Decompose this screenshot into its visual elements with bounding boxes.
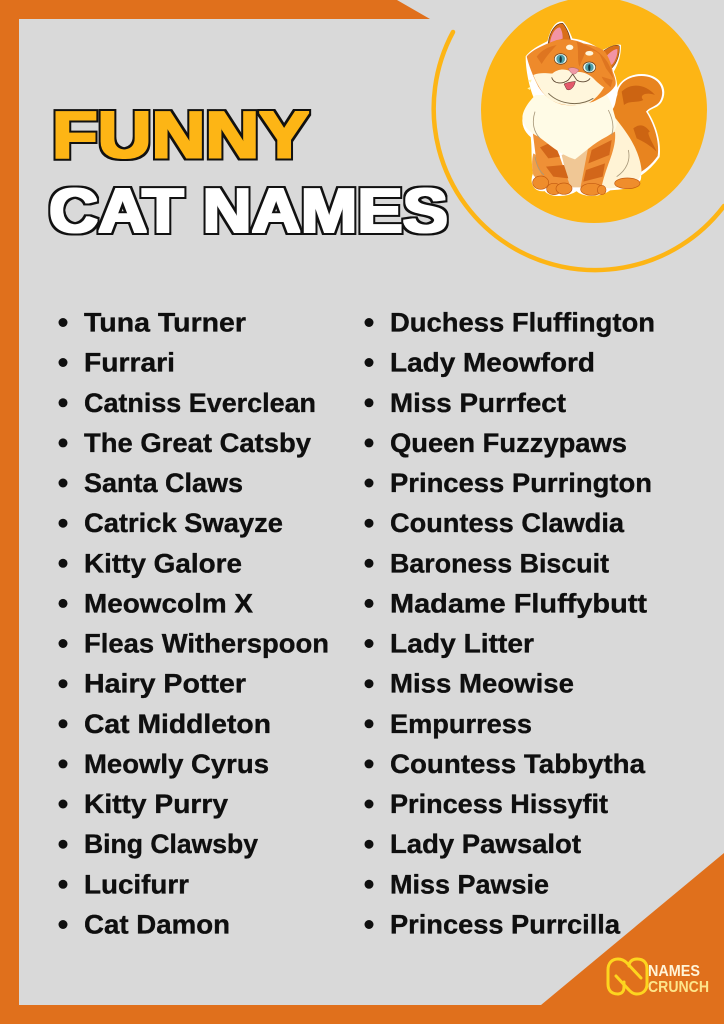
right name list xyxy=(364,308,655,940)
names: Lady Pawsalot xyxy=(390,829,581,859)
names: Queen Fuzzypaws xyxy=(390,428,627,458)
cat chin line xyxy=(548,93,593,104)
cat back haunch xyxy=(532,153,553,183)
names xyxy=(390,308,655,940)
cat left eye xyxy=(554,54,567,64)
yellow circle behind cat xyxy=(481,0,707,223)
cat silhouette sticker edge xyxy=(523,23,663,195)
names: Cat Middleton xyxy=(84,709,271,739)
names: Kitty Purry xyxy=(84,789,228,819)
names: Catrick Swayze xyxy=(84,508,283,538)
names: Meowly Cyrus xyxy=(84,749,269,779)
names: Furrari xyxy=(84,348,175,378)
cat right inner ear xyxy=(605,49,617,65)
cat right leg xyxy=(581,132,615,187)
cat head markings xyxy=(537,42,613,87)
names: Kitty Galore xyxy=(84,548,242,578)
cat left inner ear xyxy=(550,27,563,43)
title xyxy=(49,98,448,246)
cat fur lines xyxy=(533,110,629,177)
cat tail xyxy=(607,76,662,177)
logo word CRUNCH: CRUNCH xyxy=(648,979,709,996)
names: Miss Pawsie xyxy=(390,869,549,899)
names: Countess Tabbytha xyxy=(390,749,646,779)
logo mark xyxy=(608,959,647,994)
names: Catniss Everclean xyxy=(84,388,316,418)
cat belly xyxy=(562,145,590,187)
cat forehead spots xyxy=(566,45,593,56)
cat left leg xyxy=(533,132,571,187)
names: Countess Clawdia xyxy=(390,508,625,538)
cat chest fur xyxy=(522,95,617,159)
names: Cat Damon xyxy=(84,910,230,940)
cat right eye xyxy=(583,62,596,73)
cat nose xyxy=(568,68,579,74)
cat right ear xyxy=(600,45,619,68)
left name list xyxy=(58,308,329,940)
cat left ear xyxy=(548,23,571,43)
names: Duchess Fluffington xyxy=(390,308,655,338)
names: Lady Meowford xyxy=(390,348,595,378)
names: Tuna Turner xyxy=(84,308,247,338)
names: Princess Purrcilla xyxy=(390,910,621,940)
names: Princess Purrington xyxy=(390,468,652,498)
cat tongue xyxy=(564,81,575,90)
panel: orange top-left frame xyxy=(0,0,430,1024)
names xyxy=(84,308,329,940)
panel: orange bottom-right frame xyxy=(0,853,724,1024)
bullets xyxy=(58,318,68,929)
names: Miss Meowise xyxy=(390,669,574,699)
title line: FUNNY: FUNNY xyxy=(52,98,309,172)
names: Miss Purrfect xyxy=(390,388,566,418)
logo: Names Crunch xyxy=(608,959,709,996)
icon: orange cat illustration xyxy=(522,23,663,195)
logo word NAMES: NAMES xyxy=(648,963,700,980)
cat whisker pads and mouth xyxy=(552,74,590,83)
names: Fleas Witherspoon xyxy=(84,628,329,658)
names: Hairy Potter xyxy=(84,669,247,699)
cat head xyxy=(527,39,616,105)
names: Lucifurr xyxy=(84,869,189,899)
decorative ring arc xyxy=(434,32,724,270)
names: Bing Clawsby xyxy=(84,829,258,859)
cat sparkle xyxy=(527,79,532,90)
bullets xyxy=(364,318,374,929)
names: Empurress xyxy=(390,709,532,739)
cat muzzle and ruff xyxy=(533,69,604,105)
names: Lady Litter xyxy=(390,628,535,658)
names: Princess Hissyfit xyxy=(390,789,608,819)
names: Baroness Biscuit xyxy=(390,548,609,578)
names: The Great Catsby xyxy=(84,428,311,458)
names: Madame Fluffybutt xyxy=(390,588,647,618)
cat rear body xyxy=(587,113,641,188)
cat paws xyxy=(533,176,640,195)
names: Meowcolm X xyxy=(84,588,253,618)
names: Santa Claws xyxy=(84,468,243,498)
title line: CAT NAMES: CAT NAMES xyxy=(49,177,448,246)
